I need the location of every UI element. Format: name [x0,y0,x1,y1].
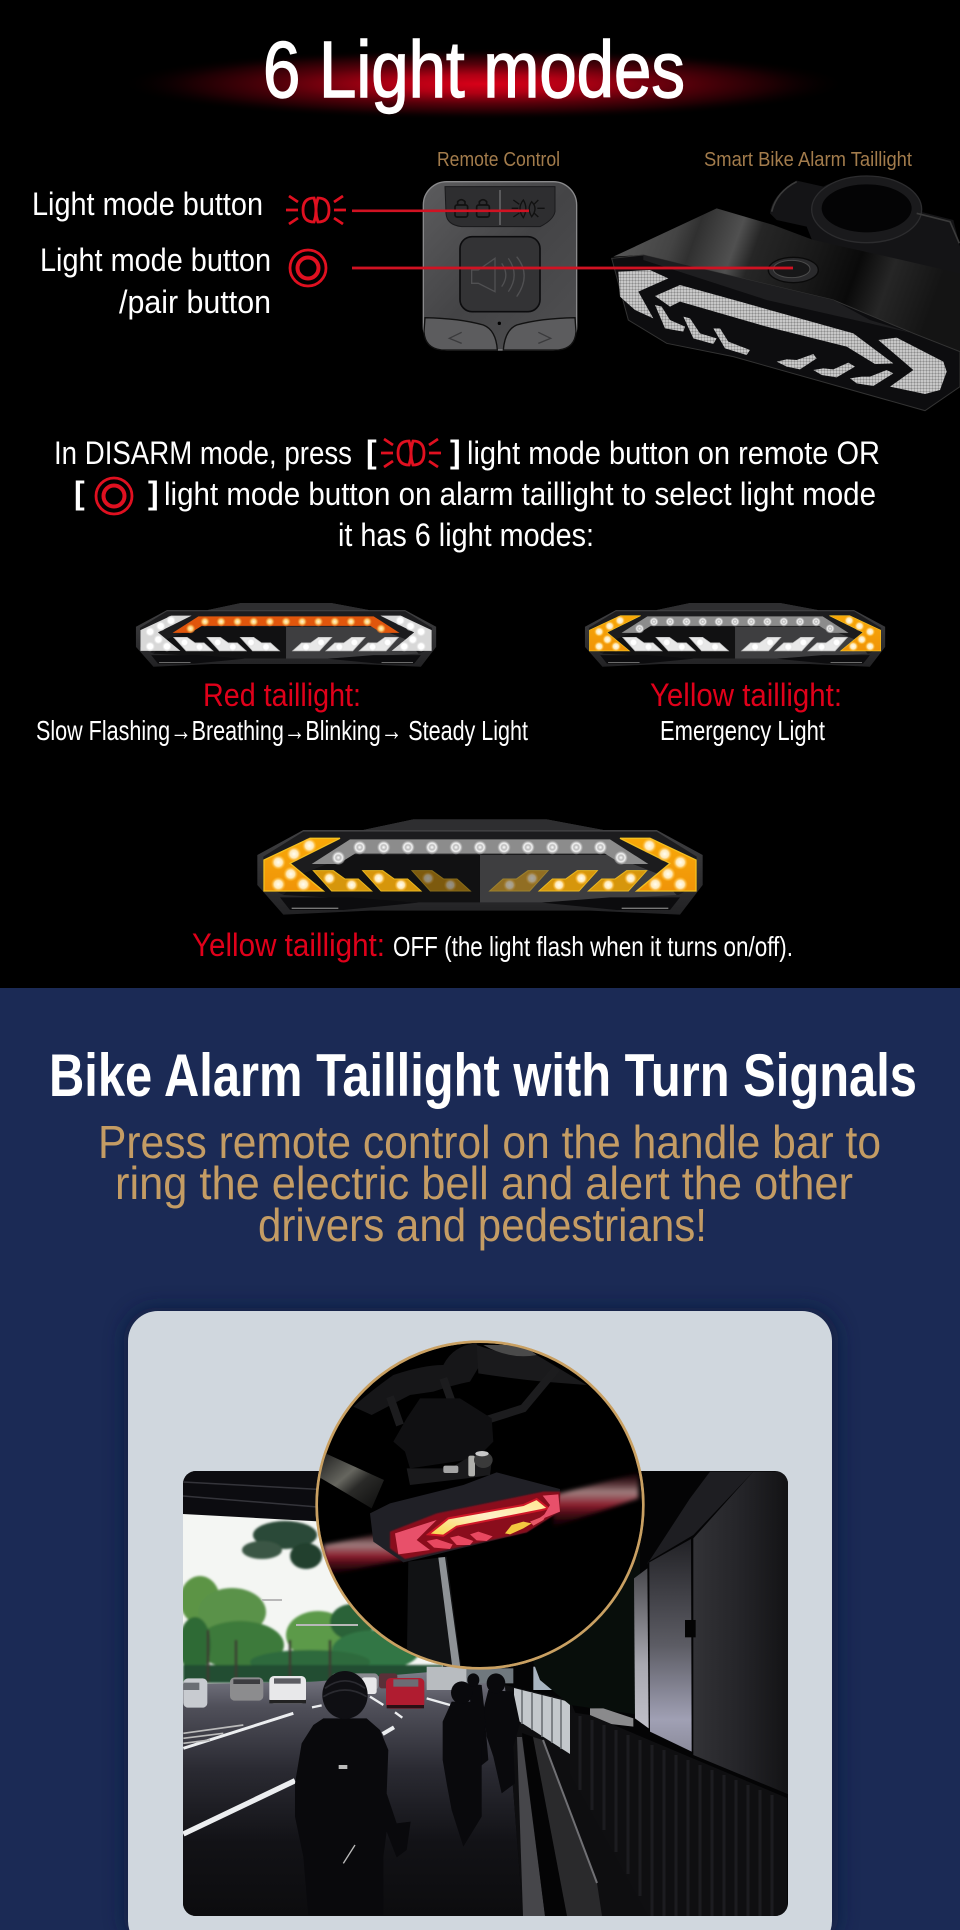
card shadow [124,1308,838,1930]
light segments [618,270,947,394]
subheading: Press remote control on the handle bar to [98,1116,881,1168]
instructions text: light mode button on remote OR [467,435,880,471]
instructions text [54,434,880,553]
text: yellow taillight off: Yellow taillight: [192,927,385,963]
cyclists [295,1671,520,1864]
lower face [612,255,960,411]
trees [179,1521,443,1683]
sky [183,1512,443,1687]
red leader line to remote button [352,210,529,212]
sidewalk [505,1685,660,1916]
button [768,257,818,283]
instructions text: [ [74,475,85,511]
road [183,1672,523,1916]
body top surface [613,208,960,352]
taillight product photo [612,176,960,411]
text: yellow taillight off: OFF (the light flash when it turns on/off). [393,931,793,962]
wall [590,1472,790,1795]
text: yellow taillight: Yellow taillight: [650,677,842,713]
text: light mode pair button [40,242,271,320]
traffic signal [262,1600,358,1625]
taillight illustration: yellow emergency mode [585,603,885,667]
text: light mode button: Light mode button [32,186,263,222]
seat post [407,1557,462,1672]
text: emergency light: Emergency Light [660,715,825,746]
title: 6 Light modes [263,25,685,114]
light streak left [322,1533,402,1574]
remote control device [423,182,577,350]
arrow left [395,1520,437,1554]
instructions text: [ [366,434,377,470]
clamp ring [770,176,960,277]
text: red taillight: Red taillight: [203,677,361,713]
seat tube left [318,1452,384,1508]
panel: black light modes section [0,0,960,988]
seat clamp [393,1398,493,1485]
red leader line to taillight button [352,267,793,269]
text: yellow taillight off [192,927,793,963]
center bar [428,1499,548,1536]
card [128,1311,832,1930]
taillight illustration: red mode [136,603,436,667]
taillight red face [390,1492,560,1559]
white fence [514,1688,570,1754]
icon: concentric rings button [290,250,326,286]
dark foliage [533,1546,640,1714]
subheading [98,1116,881,1251]
text: light mode pair button: /pair button [119,284,271,320]
light streak right [553,1473,638,1527]
text: light mode pair button: Light mode button [40,242,271,278]
instructions text: it has 6 light modes: [338,517,594,553]
instructions text: light mode button on alarm taillight to select light mode [164,476,876,512]
instructions text: ] [450,434,461,470]
taillight illustration: yellow off mode [257,819,703,915]
taillight body [370,1472,560,1562]
panel: navy section [0,988,960,1930]
dark fence [570,1712,787,1916]
overpass [183,1471,330,1522]
saddle [353,1343,587,1425]
title red glow [119,48,849,120]
subheading: drivers and pedestrians! [258,1199,707,1251]
text: red taillight modes: Slow Flashing→Breathing→Blinking→ Steady Light [36,715,528,746]
cars [183,1667,553,1709]
label: remote control: Remote Control [437,149,560,171]
street photo [179,1471,790,1916]
arrow right [542,1494,560,1519]
chevrons [427,1532,493,1549]
icon: lamp button [286,196,346,224]
circular inset: taillight on bike [317,1342,643,1672]
instructions text: ] [148,475,159,511]
lane markings [183,1697,450,1834]
instructions text: In DISARM mode, press [54,435,352,471]
label: smart bike alarm taillight: Smart Bike Alarm Taillight [704,149,912,171]
subheading: ring the electric bell and alert the other [115,1157,853,1209]
